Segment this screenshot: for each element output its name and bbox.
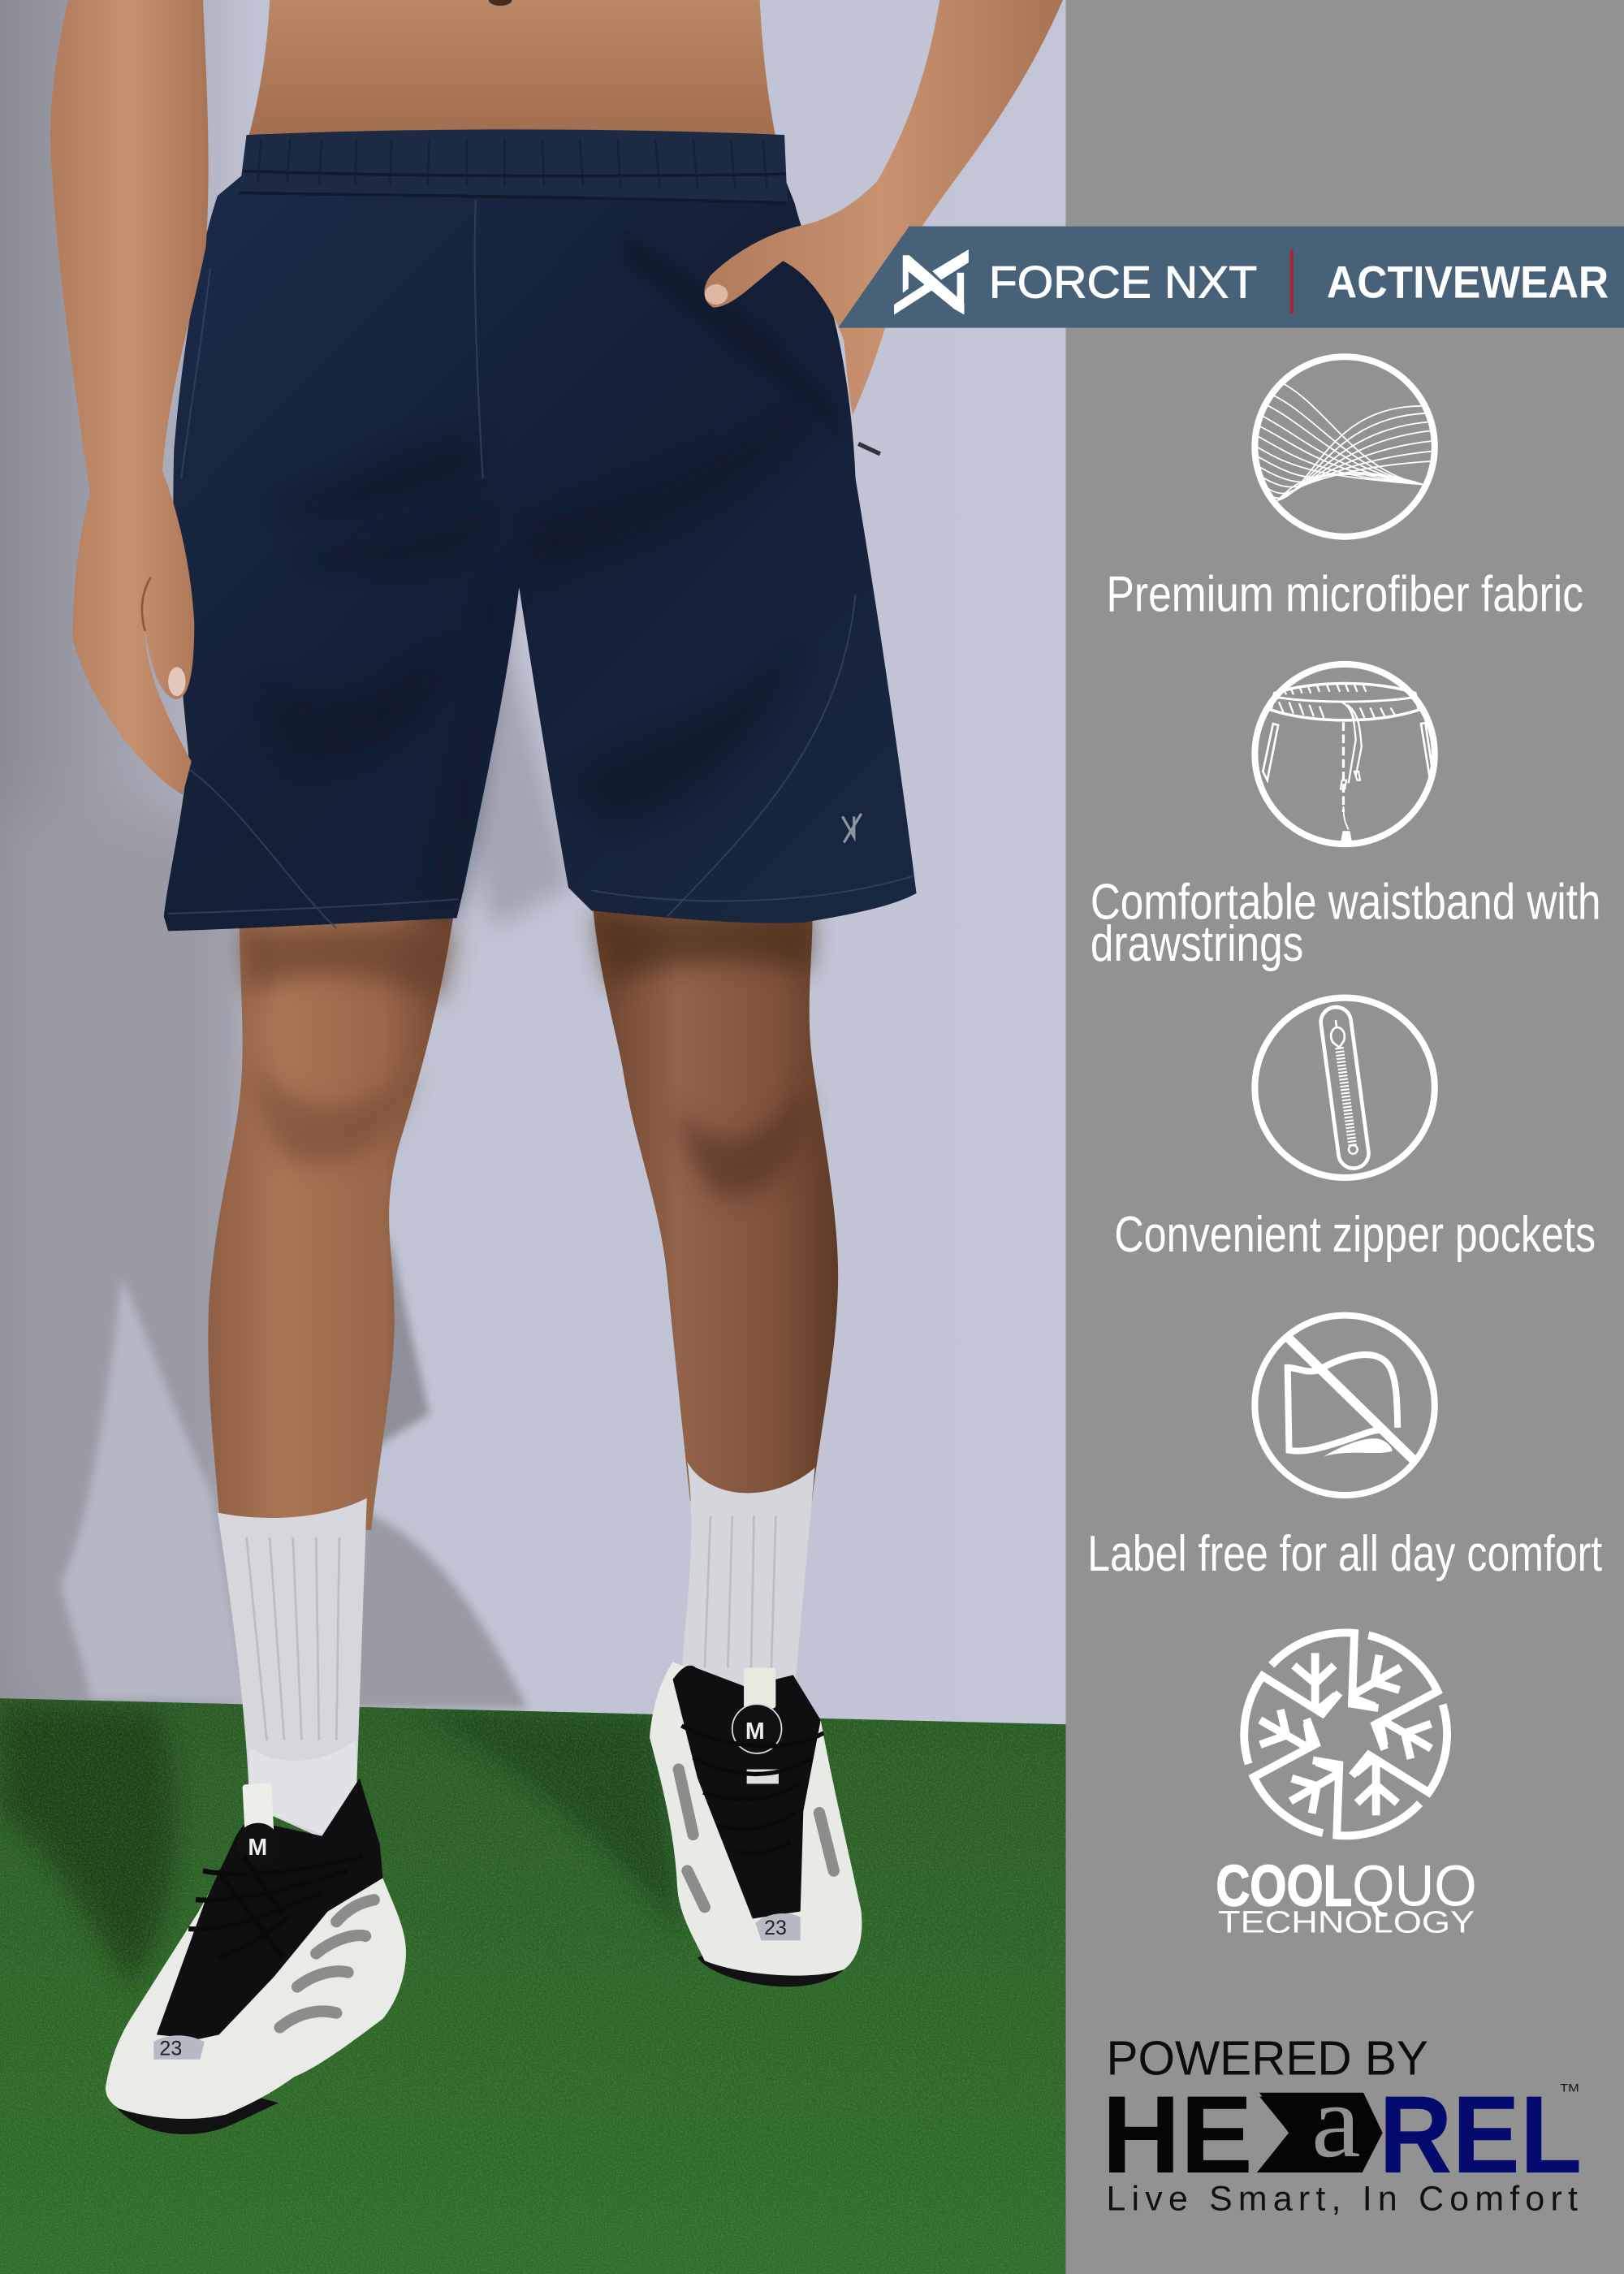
brand name: FORCE NXT (989, 257, 1257, 308)
Hexarel wordmark: TM (1560, 2082, 1579, 2095)
caption: drawstrings (1091, 915, 1303, 972)
icon: snowflake (1220, 1619, 1471, 1849)
leg: left (208, 892, 456, 1530)
icon: fabric waves (1255, 357, 1435, 537)
divider (1290, 249, 1293, 314)
seams (168, 200, 914, 928)
shorts logo mark (843, 814, 862, 843)
arm: left (50, 0, 209, 795)
panel: gray feature column (1065, 0, 1624, 2274)
shoe: right: M (745, 1718, 765, 1744)
Coolquo wordmark: QUO (1352, 1853, 1477, 1918)
shoe: left (106, 1778, 406, 2134)
feature: label free (1087, 1316, 1602, 1582)
shoe: left: 23 (159, 2037, 182, 2060)
feature: Coolquo technology (1216, 1619, 1477, 1939)
wall shadows (0, 638, 572, 1711)
panel: product photo (0, 0, 1065, 2274)
sock: left (218, 1498, 367, 1857)
waistband (240, 129, 788, 203)
shorts (164, 129, 917, 931)
zipper pull (858, 443, 880, 454)
feature: waistband (1091, 664, 1600, 972)
icon: no label (1255, 1316, 1435, 1495)
leg: right (592, 892, 838, 1501)
Hexarel wordmark: HE (1102, 2073, 1253, 2196)
icon: waistband with drawstring (1255, 664, 1435, 844)
Coolquo wordmark (1216, 1853, 1477, 1939)
icon: zipper (1255, 998, 1435, 1178)
grass floor (0, 1698, 1065, 2274)
sock: right (681, 1462, 815, 1694)
tagline: Live Smart, In Comfort (1106, 2179, 1578, 2218)
category name: ACTIVEWEAR (1327, 257, 1609, 308)
Hexarel wordmark: X (1255, 2073, 1345, 2196)
Coolquo wordmark: TECHNOLOGY (1218, 1904, 1475, 1939)
hexagon badge (1257, 2093, 1383, 2172)
icon: Force NXT logo (894, 249, 969, 315)
feature: zipper pockets (1114, 998, 1596, 1263)
Coolquo wordmark: COOL (1216, 1853, 1352, 1918)
brand banner (838, 227, 1624, 328)
shoe: right (650, 1662, 862, 1987)
wall backdrop (0, 0, 1065, 1726)
logo: powered by Hexarel (1102, 2032, 1582, 2218)
Hexarel wordmark: REL (1379, 2073, 1582, 2196)
knee shading (240, 914, 812, 1197)
torso (247, 0, 777, 145)
arm: right with hand in pocket (704, 0, 1063, 415)
shoe: right: 23 (764, 1917, 787, 1939)
Hexarel wordmark: a (1311, 2063, 1361, 2179)
fabric folds (261, 232, 841, 914)
feature: microfiber fabric (1106, 357, 1583, 623)
powered by line: POWERED BY (1106, 2032, 1428, 2085)
shoe: left: M (248, 1835, 267, 1861)
Hexarel wordmark (1102, 2063, 1582, 2196)
caption (1091, 873, 1600, 972)
